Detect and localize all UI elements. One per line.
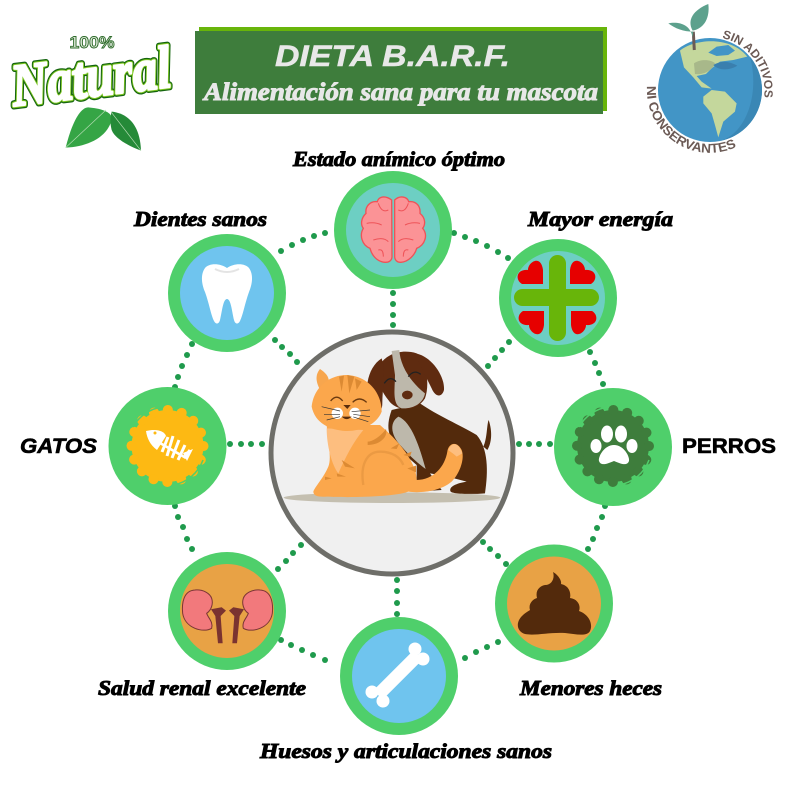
icon: kidneys xyxy=(182,590,273,643)
script word: Natural: Natural xyxy=(7,34,175,119)
icon: hearts and cross xyxy=(514,255,599,341)
arc text: sin aditivos: SIN ADITIVOS xyxy=(723,30,773,98)
label: huesos y articulaciones sanos: Huesos y articulaciones sanos xyxy=(259,739,552,763)
banner back edge xyxy=(199,27,607,111)
label: salud renal excelente: Salud renal excelente xyxy=(98,676,306,700)
node: gatos (fish badge) xyxy=(108,387,226,505)
dotted connectors xyxy=(172,230,608,663)
globe artwork xyxy=(658,4,762,142)
label: perros: PERROS xyxy=(682,435,776,458)
logo: globe xyxy=(646,4,773,153)
sprout xyxy=(689,32,699,50)
cat xyxy=(312,369,463,497)
label: gatos: GATOS xyxy=(20,435,97,458)
logo: 100% Natural xyxy=(7,33,175,151)
dog xyxy=(367,350,491,494)
node: dientes sanos (tooth) xyxy=(168,234,286,352)
label: mayor energia: Mayor energía xyxy=(527,207,673,231)
label: dientes sanos: Dientes sanos xyxy=(133,207,267,231)
icon: paw xyxy=(590,426,638,464)
icon: brain xyxy=(361,197,425,262)
subtitle: Alimentación sana para tu mascota xyxy=(202,79,598,106)
icon: leaves xyxy=(66,107,141,151)
label: menores heces: Menores heces xyxy=(519,676,662,700)
node: mayor energia (heart cross) xyxy=(499,239,617,357)
icon: poop xyxy=(518,572,591,635)
title: DIETA B.A.R.F. xyxy=(275,40,510,73)
central ring xyxy=(271,332,513,574)
label: estado animico optimo: Estado anímico óptimo xyxy=(292,147,505,171)
title banner xyxy=(195,27,607,114)
badge text: 100%: 100% xyxy=(70,33,114,52)
node: salud renal (kidneys) xyxy=(168,552,286,670)
icon: tooth xyxy=(202,264,252,324)
ground shadow xyxy=(284,492,500,503)
icon: fish bones xyxy=(146,430,193,461)
node: huesos (bone) xyxy=(340,617,458,735)
central pets illustration xyxy=(271,332,513,574)
script word: Natural: Natural xyxy=(7,34,175,119)
node: perros (paw badge) xyxy=(554,388,672,506)
node: estado animico (brain) xyxy=(334,171,452,289)
banner panel xyxy=(195,31,603,114)
node: menores heces (poop) xyxy=(495,544,613,662)
arc text: ni conservantes: NI CONSERVANTES xyxy=(646,86,736,153)
script word: Natural: Natural xyxy=(7,34,175,119)
icon: bone xyxy=(366,642,430,708)
